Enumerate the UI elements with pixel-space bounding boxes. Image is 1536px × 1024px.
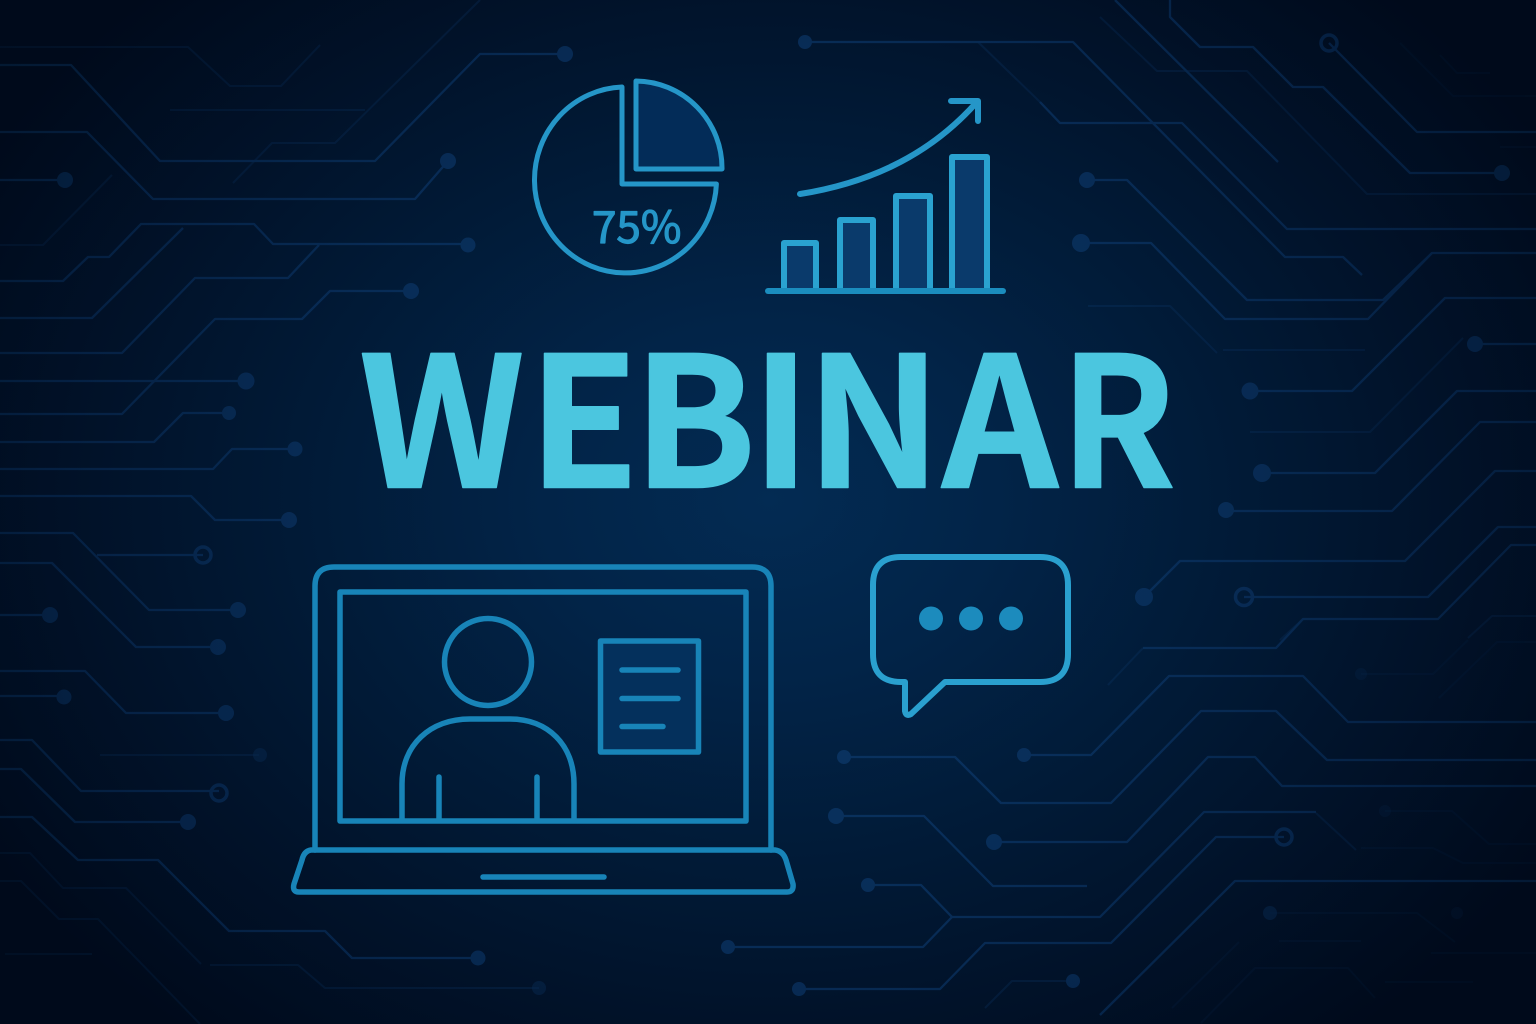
document (600, 641, 698, 752)
title: R (1060, 278, 1176, 540)
presenter (402, 618, 574, 820)
icon: speech bubble (873, 557, 1068, 715)
icon: growth bar chart (768, 101, 1003, 291)
pie chart label: 75% (592, 192, 681, 256)
title: WEBINA (359, 278, 1059, 540)
icon: pie chart (534, 81, 722, 273)
icon: laptop with presenter (294, 567, 793, 892)
